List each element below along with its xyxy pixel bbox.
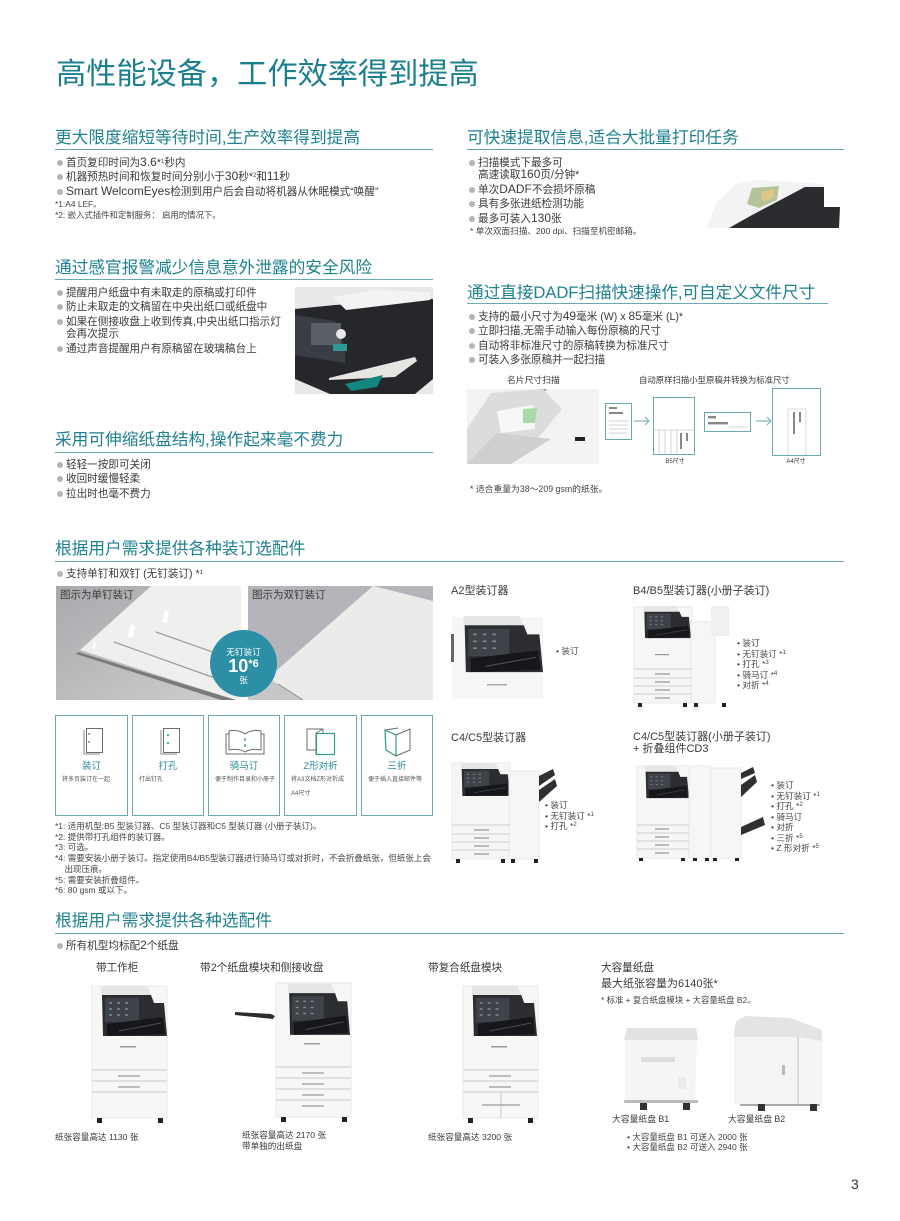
card: saddle stitch — [208, 715, 280, 816]
bullet list: capture: 单次DADF不会损坏原稿 — [478, 182, 595, 196]
feed capacities — [627, 1132, 748, 1152]
footnotes: finishers: 出现压痕。 — [64, 864, 107, 874]
heading: tray — [55, 427, 433, 453]
card text: A4尺寸 — [291, 791, 310, 797]
panel: shorter waiting time — [55, 128, 433, 220]
bullet list: capture: 具有多张进纸检测功能 — [478, 198, 584, 210]
footnotes: finishers: *6: 80 gsm 或以下。 — [55, 885, 132, 895]
label B2: 大容量纸盘 B2 — [728, 1114, 785, 1124]
card: Z fold — [284, 715, 357, 816]
option title: 大容量纸盘 — [601, 962, 654, 974]
panel: direct DADF scanning — [467, 283, 828, 494]
bullet list: capture: 最多可装入130张 — [478, 211, 562, 225]
feature text: • 对折 — [771, 822, 794, 832]
bullet list: security: 防止未取走的文稿留在中央出纸口或纸盘中 — [66, 301, 267, 313]
photo: double staple — [248, 586, 433, 700]
bullet list: security: 提醒用户纸盘中有未取走的原稿或打印件 — [66, 287, 257, 299]
heading: fast capture — [467, 125, 844, 150]
label: auto scan: 自动原样扫描小型原稿并转换为标准尺寸 — [639, 375, 790, 385]
feature text: • 无钉装订 *1 — [737, 648, 786, 658]
printer: C4/C5 — [452, 762, 557, 863]
feature text: • 打孔 *3 — [737, 659, 769, 669]
feeder B1 — [623, 1027, 699, 1112]
icon: z fold — [306, 728, 336, 756]
feature text — [771, 780, 820, 853]
caption: 带单独的出纸盘 — [242, 1141, 302, 1151]
feature text: • 装订 — [771, 780, 794, 790]
bullet list: waiting times: 首页复印时间为3.6*1秒内 — [66, 155, 186, 169]
label: B5 size: B5尺寸 — [665, 459, 685, 465]
caption — [242, 1130, 326, 1152]
card title: 三折 — [387, 761, 406, 772]
diagram: receipt to A4 — [704, 388, 821, 456]
option: tandem tray module — [428, 961, 548, 1143]
capacity text: 最大纸张容量为6140张* — [601, 978, 718, 990]
printer: A2 — [451, 616, 543, 699]
card title: 装订 — [82, 761, 101, 772]
feed capacities: • 大容量纸盘 B1 可送入 2000 张 — [627, 1132, 748, 1142]
panel: other options — [55, 908, 844, 1154]
panel: finisher options — [55, 539, 844, 895]
bullet list: DADF: 自动将非标准尺寸的原稿转换为标准尺寸 — [478, 340, 669, 352]
photo: single staple — [56, 586, 241, 700]
feature text: • 装订 — [545, 800, 568, 810]
footnote: * 标准 + 复合纸盘模块 + 大容量纸盘 B2。 — [601, 995, 756, 1005]
model title: C4/C5型装订器 — [451, 732, 526, 744]
card text — [291, 776, 344, 797]
footnote: paper weight: * 适合重量为38～209 gsm的纸张。 — [470, 484, 607, 494]
footnotes: waiting times: *1:A4 LEF。 — [55, 199, 102, 209]
model title: C4/C5型装订器(小册子装订) — [633, 731, 771, 743]
card title: 骑马订 — [230, 761, 258, 772]
photo: output tray — [295, 287, 433, 394]
feature text: • 三折 *5 — [771, 832, 803, 842]
option title: 带工作柜 — [96, 962, 138, 974]
page number: 3 — [851, 1176, 859, 1192]
icon: staple — [84, 728, 103, 754]
heading: DADF: 通过直接DADF扫描快速操作,可自定义文件尺寸 — [467, 283, 815, 302]
card: punch — [132, 715, 204, 816]
option title: 带复合纸盘模块 — [428, 962, 502, 974]
footnotes: finishers: *2: 提供带打孔组件的装订器。 — [55, 832, 170, 842]
bullet: two trays standard: 所有机型均标配2个纸盘 — [66, 938, 179, 952]
bullet list: DADF: 支持的最小尺寸为49毫米 (W) x 85毫米 (L)* — [478, 309, 683, 323]
label B1: 大容量纸盘 B1 — [612, 1114, 669, 1124]
bullet list: waiting times: 机器预热时间和恢复时间分别小于30秒*2和11秒 — [66, 169, 290, 183]
footnotes: finishers — [55, 821, 431, 895]
printer: tandem tray — [462, 985, 540, 1123]
option title: 带2个纸盘模块和侧接收盘 — [200, 962, 324, 974]
icon: tri fold — [384, 728, 410, 757]
option: high capacity feeder — [601, 961, 844, 1153]
model title: + 折叠组件CD3 — [633, 743, 708, 755]
feature text — [737, 638, 786, 690]
panel: fast information capture — [467, 128, 844, 236]
card: tri-fold — [361, 715, 433, 816]
model title — [633, 730, 771, 755]
feature cards — [55, 715, 433, 816]
printer: B4/B5 — [634, 606, 729, 707]
model title: A2型装订器 — [451, 585, 508, 597]
panel: extendable tray — [55, 430, 433, 500]
bullet list: tray: 轻轻一按即可关闭 — [66, 459, 151, 471]
feeder B2 — [732, 1015, 823, 1112]
bullet list: security: 会再次提示 — [66, 328, 119, 340]
heading: shorter waiting: 更大限度缩短等待时间,生产效率得到提高 — [55, 128, 360, 147]
feature text: • Z 形对折 *5 — [771, 843, 819, 853]
photo: card scanning — [467, 389, 599, 464]
callout: staple-free 10 sheets: 10*6 — [228, 656, 259, 676]
heading: tray: 采用可伸缩纸盘结构,操作起来毫不费力 — [55, 430, 343, 449]
footnotes: waiting times — [55, 199, 221, 220]
card text: 便于插入直接邮件等 — [368, 777, 422, 783]
card: stapling — [55, 715, 128, 816]
feature text: • 对折 *4 — [737, 680, 769, 690]
callout: staple-free 10 sheets: 张 — [239, 675, 248, 685]
caption: 纸张容量高达 3200 张 — [428, 1132, 512, 1142]
bullet list: tray: 收回时缓慢轻柔 — [66, 473, 140, 485]
bullet list: waiting times — [57, 155, 379, 198]
option: two tray module — [200, 961, 355, 1153]
heading: security: 通过感官报警减少信息意外泄露的安全风险 — [55, 258, 372, 277]
label: single staple: 图示为单钉装订 — [60, 589, 134, 601]
footnotes: finishers: *4: 需要安装小册子装订。指定使用B4/B5型装订器进行骑马订或对折时，不会折叠纸张，但纸张上会 — [55, 853, 431, 863]
bullet list: security — [57, 286, 281, 355]
card text: 打出钉孔 — [139, 777, 163, 783]
photo: scanner feeder — [707, 180, 840, 228]
bullet list: security: 通过声音提醒用户有原稿留在玻璃稿台上 — [66, 343, 257, 355]
heading: finisher options: 根据用户需求提供各种装订选配件 — [55, 539, 305, 558]
bullet list: capture: 高速读取160页/分钟* — [478, 167, 579, 181]
footnotes: finishers: *5: 需要安装折叠组件。 — [55, 875, 144, 885]
card title: Z形对折 — [303, 761, 338, 772]
heading: other options: 根据用户需求提供各种选配件 — [55, 911, 272, 930]
feature text: • 无钉装订 *1 — [545, 810, 594, 820]
feature text: • 骑马订 — [771, 812, 802, 822]
model title: B4/B5型装订器(小册子装订) — [633, 585, 769, 597]
feature text: • 打孔 *2 — [771, 801, 803, 811]
caption: 纸张容量高达 2170 张 — [242, 1130, 326, 1140]
option: cabinet — [55, 961, 205, 1143]
feature text: • 骑马订 *4 — [737, 670, 777, 680]
title: 高性能设备，工作效率得到提高 — [56, 58, 479, 91]
feature text: • 装订 — [737, 638, 760, 648]
model: C4/C5 finisher — [451, 732, 594, 863]
bullet list: tray — [57, 458, 151, 500]
card text: 将多页装订在一起 — [62, 777, 110, 783]
footnotes: waiting times: *2: 嵌入式插件和定制服务： 启用的情况下。 — [55, 210, 221, 220]
card text: 便于制作目录和小册子 — [215, 777, 275, 783]
feature text: • 打孔 *2 — [545, 821, 577, 831]
bullet list: DADF — [469, 309, 683, 366]
label: double staple: 图示为双钉装订 — [252, 589, 326, 601]
bullet list: capture — [469, 156, 595, 225]
heading: finisher options — [55, 536, 844, 562]
feed capacities: • 大容量纸盘 B2 可送入 2940 张 — [627, 1142, 748, 1152]
heading: shorter waiting — [55, 125, 433, 150]
feature text: • 装订 — [556, 646, 579, 656]
footnote: capture: * 单次双面扫描、200 dpi、扫描至机密邮箱。 — [470, 226, 641, 236]
label: A4 size: A4尺寸 — [786, 459, 806, 465]
printer: with cabinet — [90, 985, 169, 1123]
bullet list: capture: 扫描模式下最多可 — [478, 157, 563, 169]
bullet list: waiting times: Smart WelcomEyes检测到用户后会自动将机器从休眠模式“唤醒” — [66, 184, 379, 198]
model: C4/C5 finisher with folding unit — [633, 730, 820, 861]
caption: 纸张容量高达 1130 张 — [55, 1132, 138, 1142]
heading: fast capture: 可快速提取信息,适合大批量打印任务 — [467, 128, 739, 147]
feature text — [545, 800, 594, 831]
icon: booklet — [226, 730, 264, 754]
callout: staple-free 10 sheets: 无钉装订 — [226, 647, 261, 657]
footnotes: finishers: *1: 适用机型:B5 型装订器、C5 型装订器和C5 型装订器 (小册子装订)。 — [55, 821, 321, 831]
bullet list: tray: 拉出时也毫不费力 — [66, 488, 151, 500]
model: A2 finisher — [451, 584, 579, 699]
printer: two tray module — [235, 982, 353, 1122]
callout: staple-free 10 sheets — [210, 630, 277, 697]
diagram: small original to B5 — [605, 397, 695, 455]
label: business card scan: 名片尺寸扫描 — [507, 375, 560, 385]
icon: punch — [160, 728, 180, 754]
footnotes: finishers: *3: 可选。 — [55, 842, 93, 852]
printer: C4/C5 with folder — [636, 766, 765, 861]
card text: 将A3文档Z形对折成 — [291, 777, 344, 783]
bullet list: DADF: 立即扫描,无需手动输入每份原稿的尺寸 — [478, 325, 661, 337]
heading: security — [55, 255, 433, 280]
bullet list: DADF: 可装入多张原稿并一起扫描 — [478, 354, 605, 366]
bullet list: security: 如果在侧接收盘上收到传真,中央出纸口指示灯 — [66, 316, 281, 328]
feature text: • 无钉装订 *1 — [771, 790, 820, 800]
card title: 打孔 — [158, 761, 178, 772]
panel: security alerts — [55, 258, 433, 394]
heading: other options — [55, 908, 844, 934]
bullet: stapling: 支持单钉和双钉 (无钉装订) *1 — [66, 568, 203, 580]
model: B4/B5 finisher — [633, 584, 786, 707]
